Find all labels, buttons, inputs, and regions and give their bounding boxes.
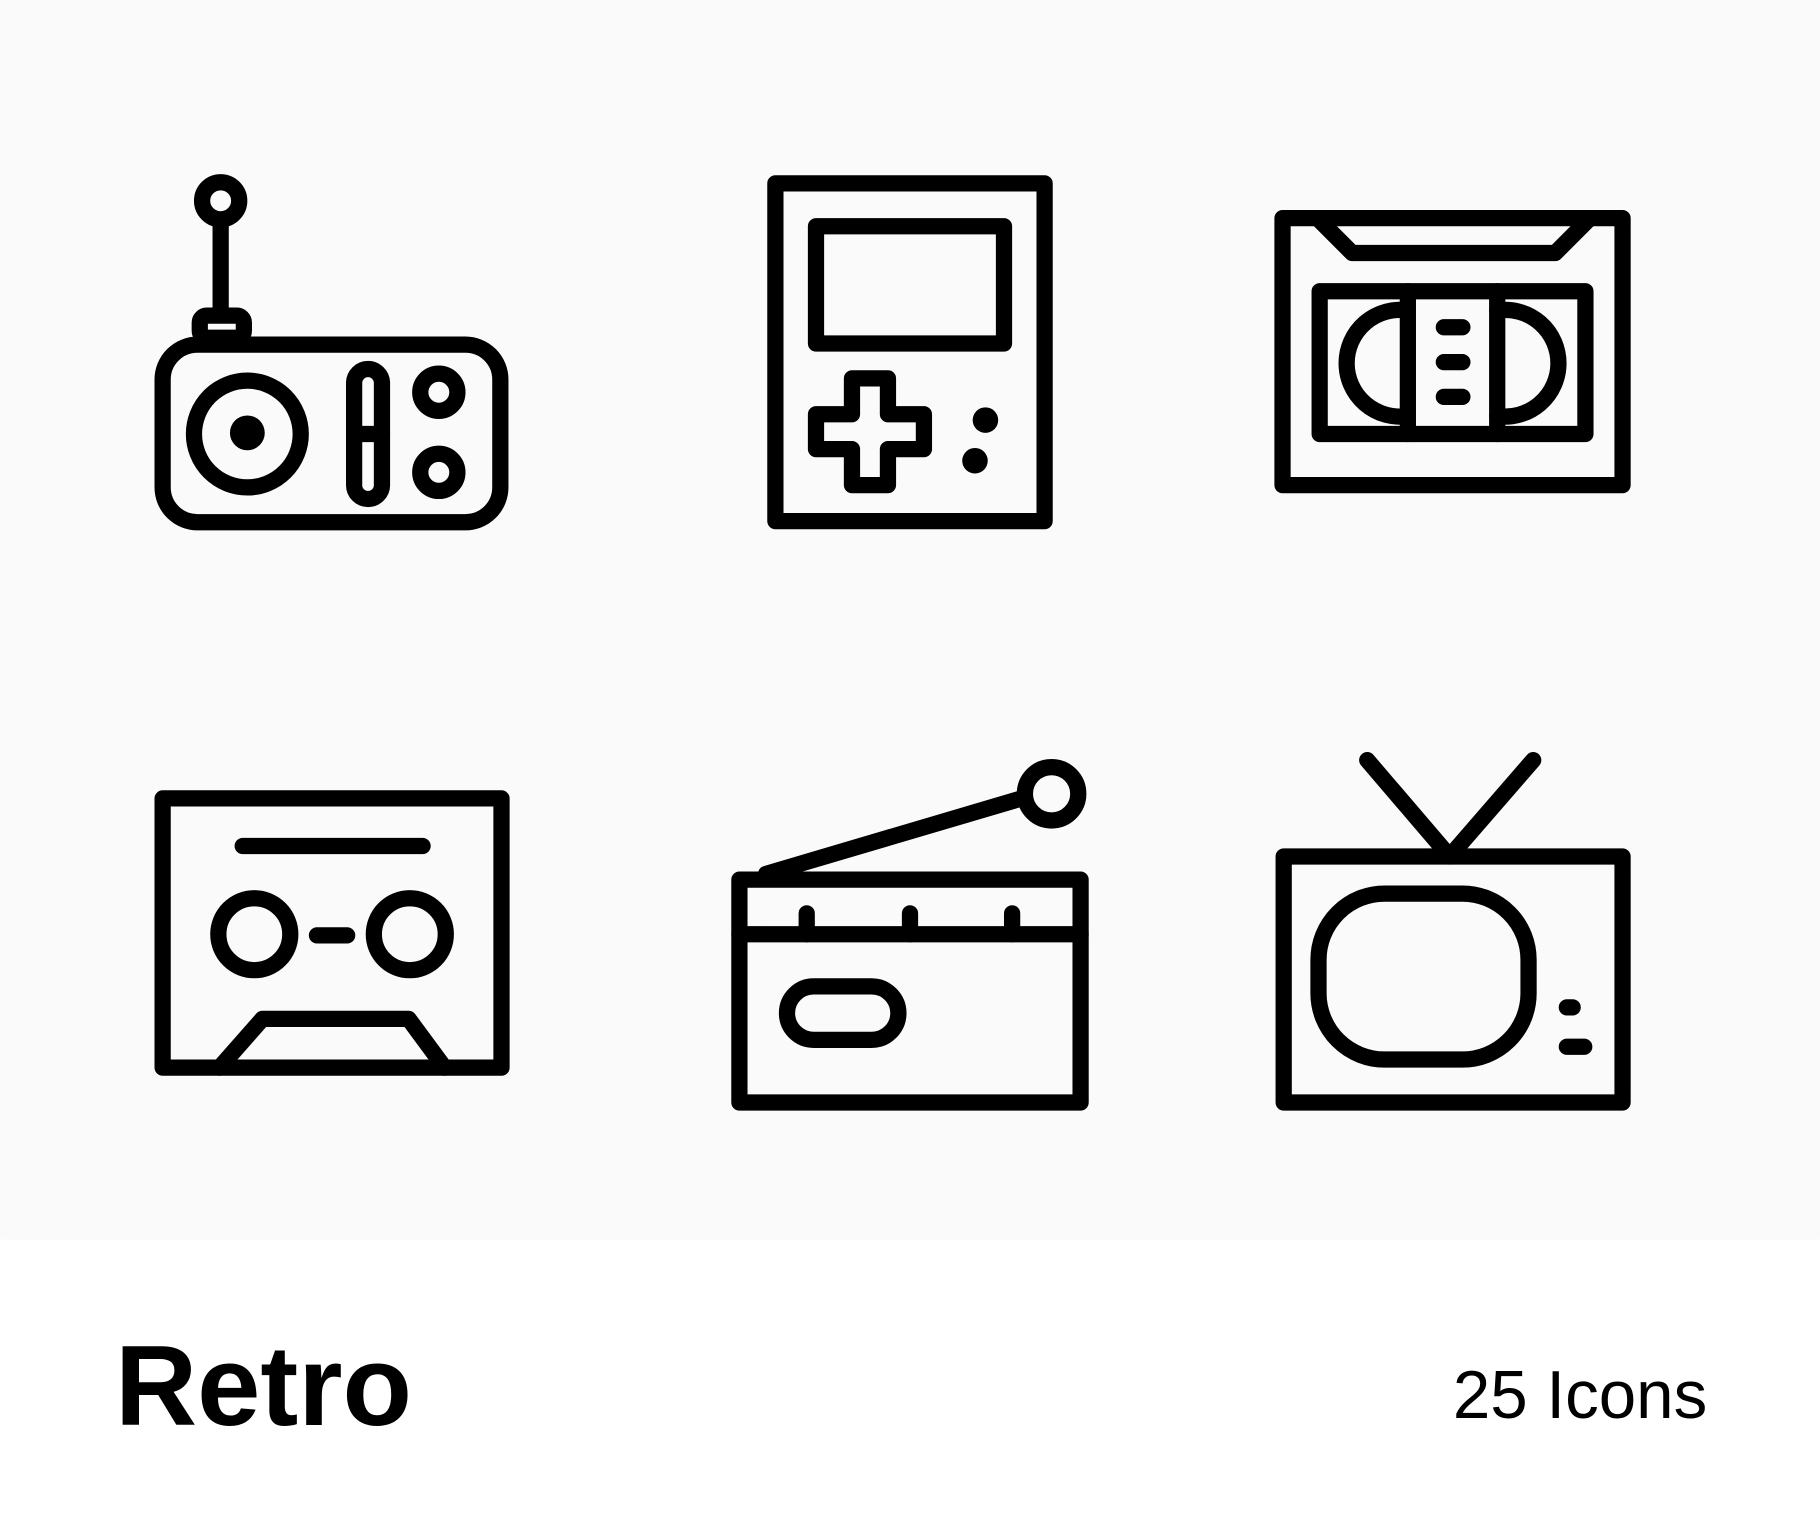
icon: television xyxy=(1284,760,1623,1102)
icon: radio controller xyxy=(163,182,500,522)
icon: portable radio xyxy=(739,767,1081,1102)
icon count: 25 Icons xyxy=(1453,1358,1707,1433)
title: Retro xyxy=(115,1323,412,1450)
icon: handheld game console xyxy=(775,183,1045,521)
icon: cassette tape xyxy=(163,798,501,1068)
icon: VHS tape xyxy=(1283,218,1623,485)
